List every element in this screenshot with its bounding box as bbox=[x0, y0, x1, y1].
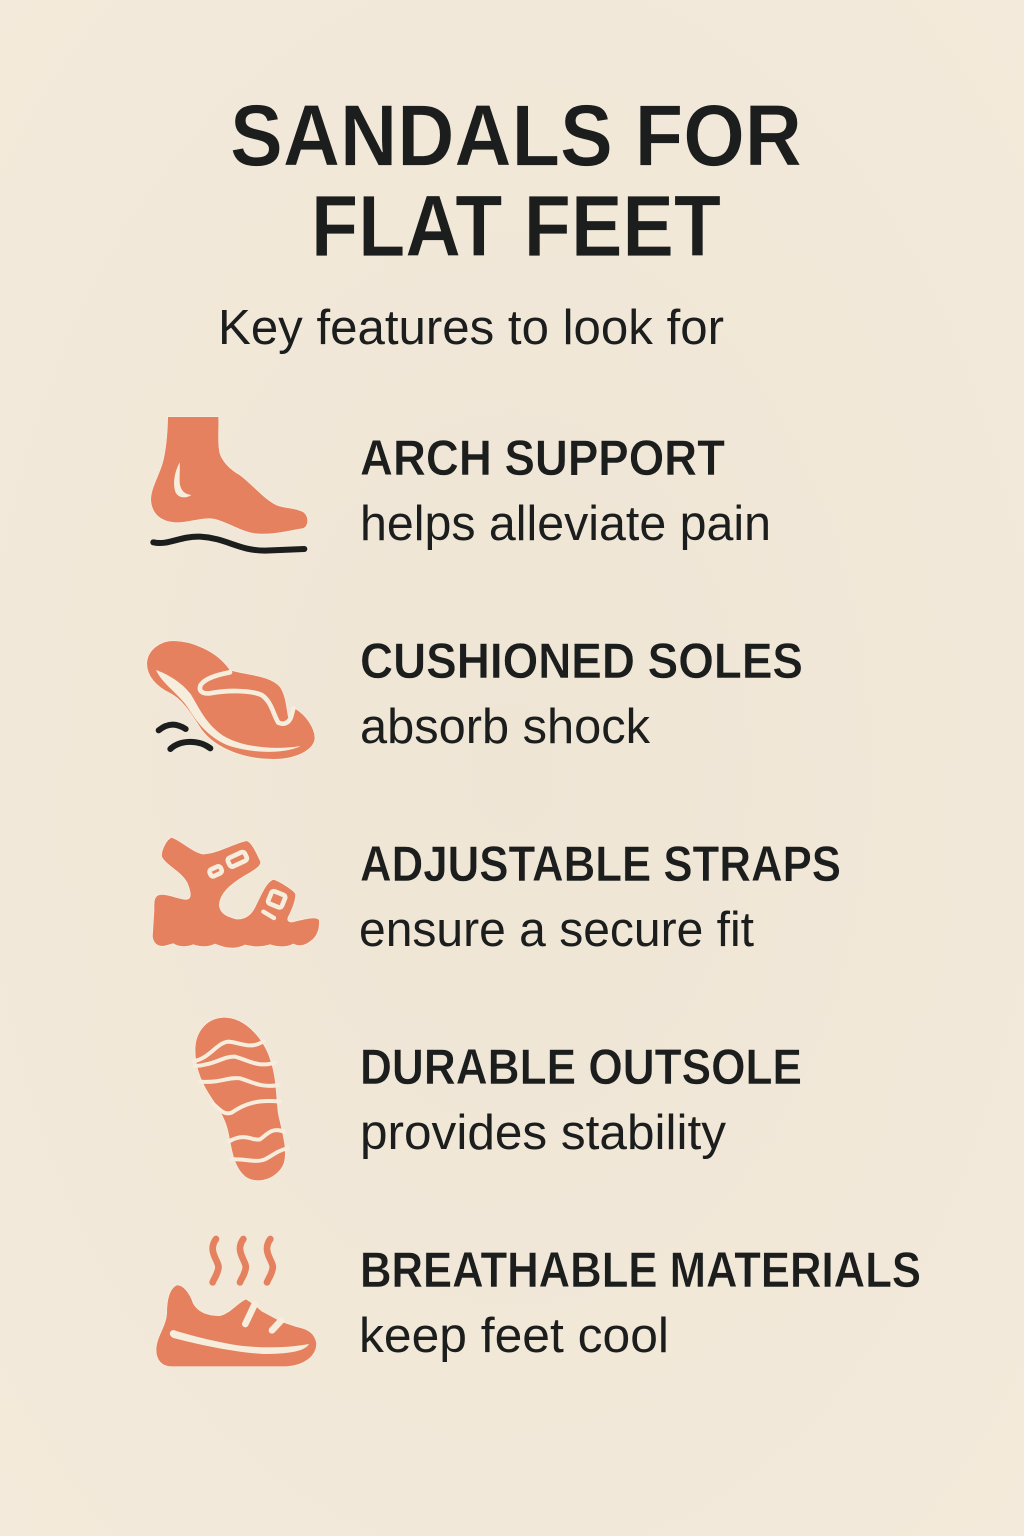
heading: breathable materials: BREATHABLE MATERIALS bbox=[360, 1242, 921, 1298]
heading: arch support: ARCH SUPPORT bbox=[360, 430, 725, 486]
title bbox=[230, 88, 802, 275]
icon: treaded outsole bbox=[193, 1017, 288, 1181]
title: FLAT FEET bbox=[311, 178, 721, 275]
description: arch support: helps alleviate pain bbox=[360, 497, 771, 551]
feature: breathable materials bbox=[156, 1239, 921, 1367]
heading: durable outsole: DURABLE OUTSOLE bbox=[360, 1039, 802, 1095]
feature: arch support bbox=[151, 417, 771, 551]
feature: cushioned soles bbox=[147, 633, 803, 759]
feature: durable outsole bbox=[193, 1017, 802, 1181]
icon: foot over arch line bbox=[151, 417, 308, 551]
description: breathable materials: keep feet cool bbox=[359, 1309, 669, 1363]
feature: adjustable straps bbox=[152, 836, 841, 957]
description: cushioned soles: absorb shock bbox=[360, 700, 650, 754]
icon: cushioned flip-flop bbox=[147, 641, 315, 759]
heading: adjustable straps: ADJUSTABLE STRAPS bbox=[360, 836, 841, 892]
description: adjustable straps: ensure a secure fit bbox=[359, 903, 754, 957]
subtitle: Key features to look for bbox=[218, 301, 724, 355]
title: SANDALS FOR bbox=[230, 88, 802, 184]
description: durable outsole: provides stability bbox=[360, 1106, 726, 1160]
icon: shoe with rising heat bbox=[156, 1239, 317, 1367]
heading: cushioned soles: CUSHIONED SOLES bbox=[360, 633, 803, 689]
icon: strapped wedge sandal bbox=[152, 837, 319, 948]
